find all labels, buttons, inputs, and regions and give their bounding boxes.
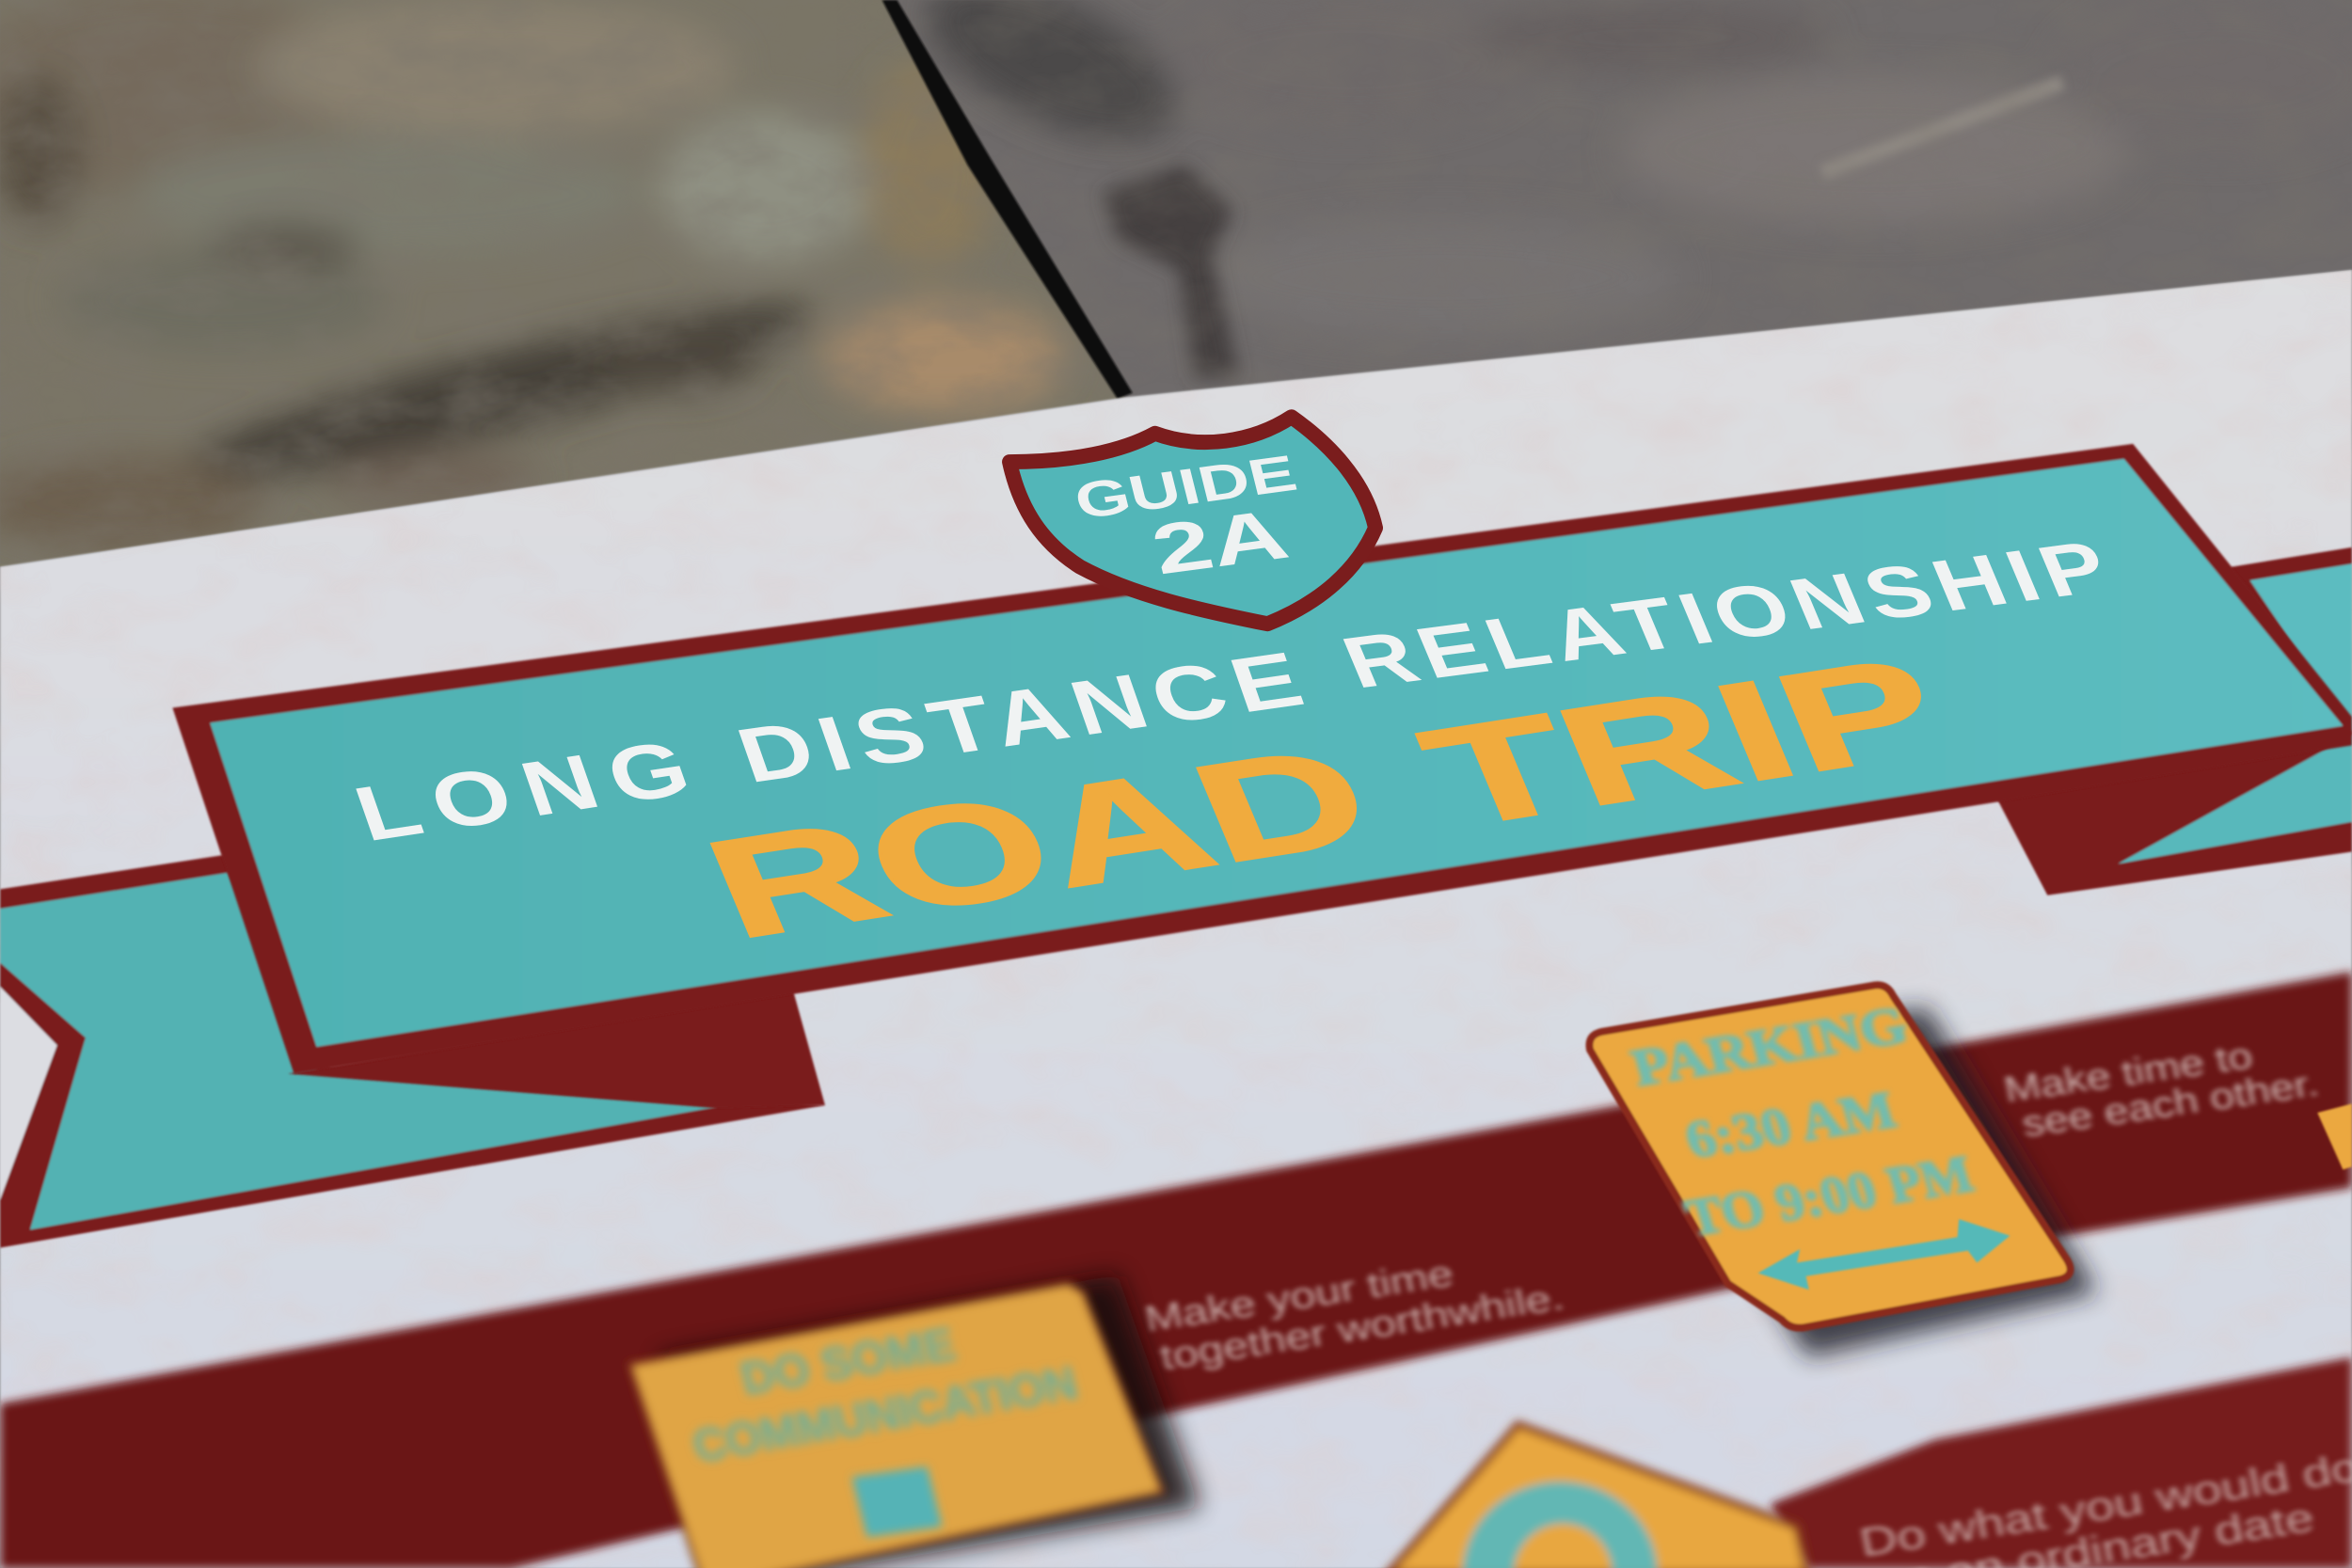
badge label: 2A: 2A xyxy=(1144,495,1295,590)
caption: make time to see each other: see each other. xyxy=(2019,1063,2322,1145)
title: long distance relationship: DISTANCE xyxy=(726,637,1313,800)
road band xyxy=(0,972,2352,1568)
title: long distance relationship xyxy=(344,526,2121,858)
main ribbon banner xyxy=(172,444,2352,1074)
title: road trip: ROAD TRIP xyxy=(685,628,1963,968)
stone background: right grey slate xyxy=(885,0,2352,404)
caption: make your time xyxy=(1141,1238,1567,1379)
road sign: communication xyxy=(630,1275,1200,1568)
caption: make time to see each other xyxy=(2000,1027,2322,1147)
title: long distance relationship: RELATIONSHIP xyxy=(1331,526,2121,704)
title: long distance relationship: LONG xyxy=(344,725,701,858)
left ribbon tail xyxy=(0,855,825,1247)
caption: make your time: Make your time xyxy=(1141,1253,1456,1339)
caption: make time to see each other: Make time to xyxy=(2000,1036,2256,1111)
sign text: DO SOME xyxy=(736,1319,961,1404)
crack between slate tiles xyxy=(882,0,1133,399)
badge label: guide: GUIDE xyxy=(1069,444,1302,530)
caption: lower right: Do what you would do xyxy=(1856,1446,2352,1565)
sign text: COMMUNICATION xyxy=(688,1357,1083,1472)
parking arrow xyxy=(1758,1219,2010,1290)
parking sign text xyxy=(1626,995,1980,1247)
caption: make your time: together worthwhile. xyxy=(1156,1276,1567,1378)
shield badge xyxy=(1009,417,1375,624)
road sign: diamond with rainbow xyxy=(1388,1425,1807,1568)
stone background: left warm slate xyxy=(0,0,1140,570)
second road band xyxy=(1770,1357,2352,1568)
road sign: partial at right edge xyxy=(2317,1103,2352,1170)
road sign: parking hours xyxy=(1589,985,2097,1357)
right ribbon tail xyxy=(1994,547,2352,895)
left ribbon fold xyxy=(288,987,825,1108)
parking sign text: 6:30 AM xyxy=(1678,1081,1902,1169)
parking sign text: PARKING xyxy=(1626,995,1914,1097)
parking sign text: TO 9:00 PM xyxy=(1678,1145,1980,1247)
sign icon xyxy=(852,1466,942,1537)
